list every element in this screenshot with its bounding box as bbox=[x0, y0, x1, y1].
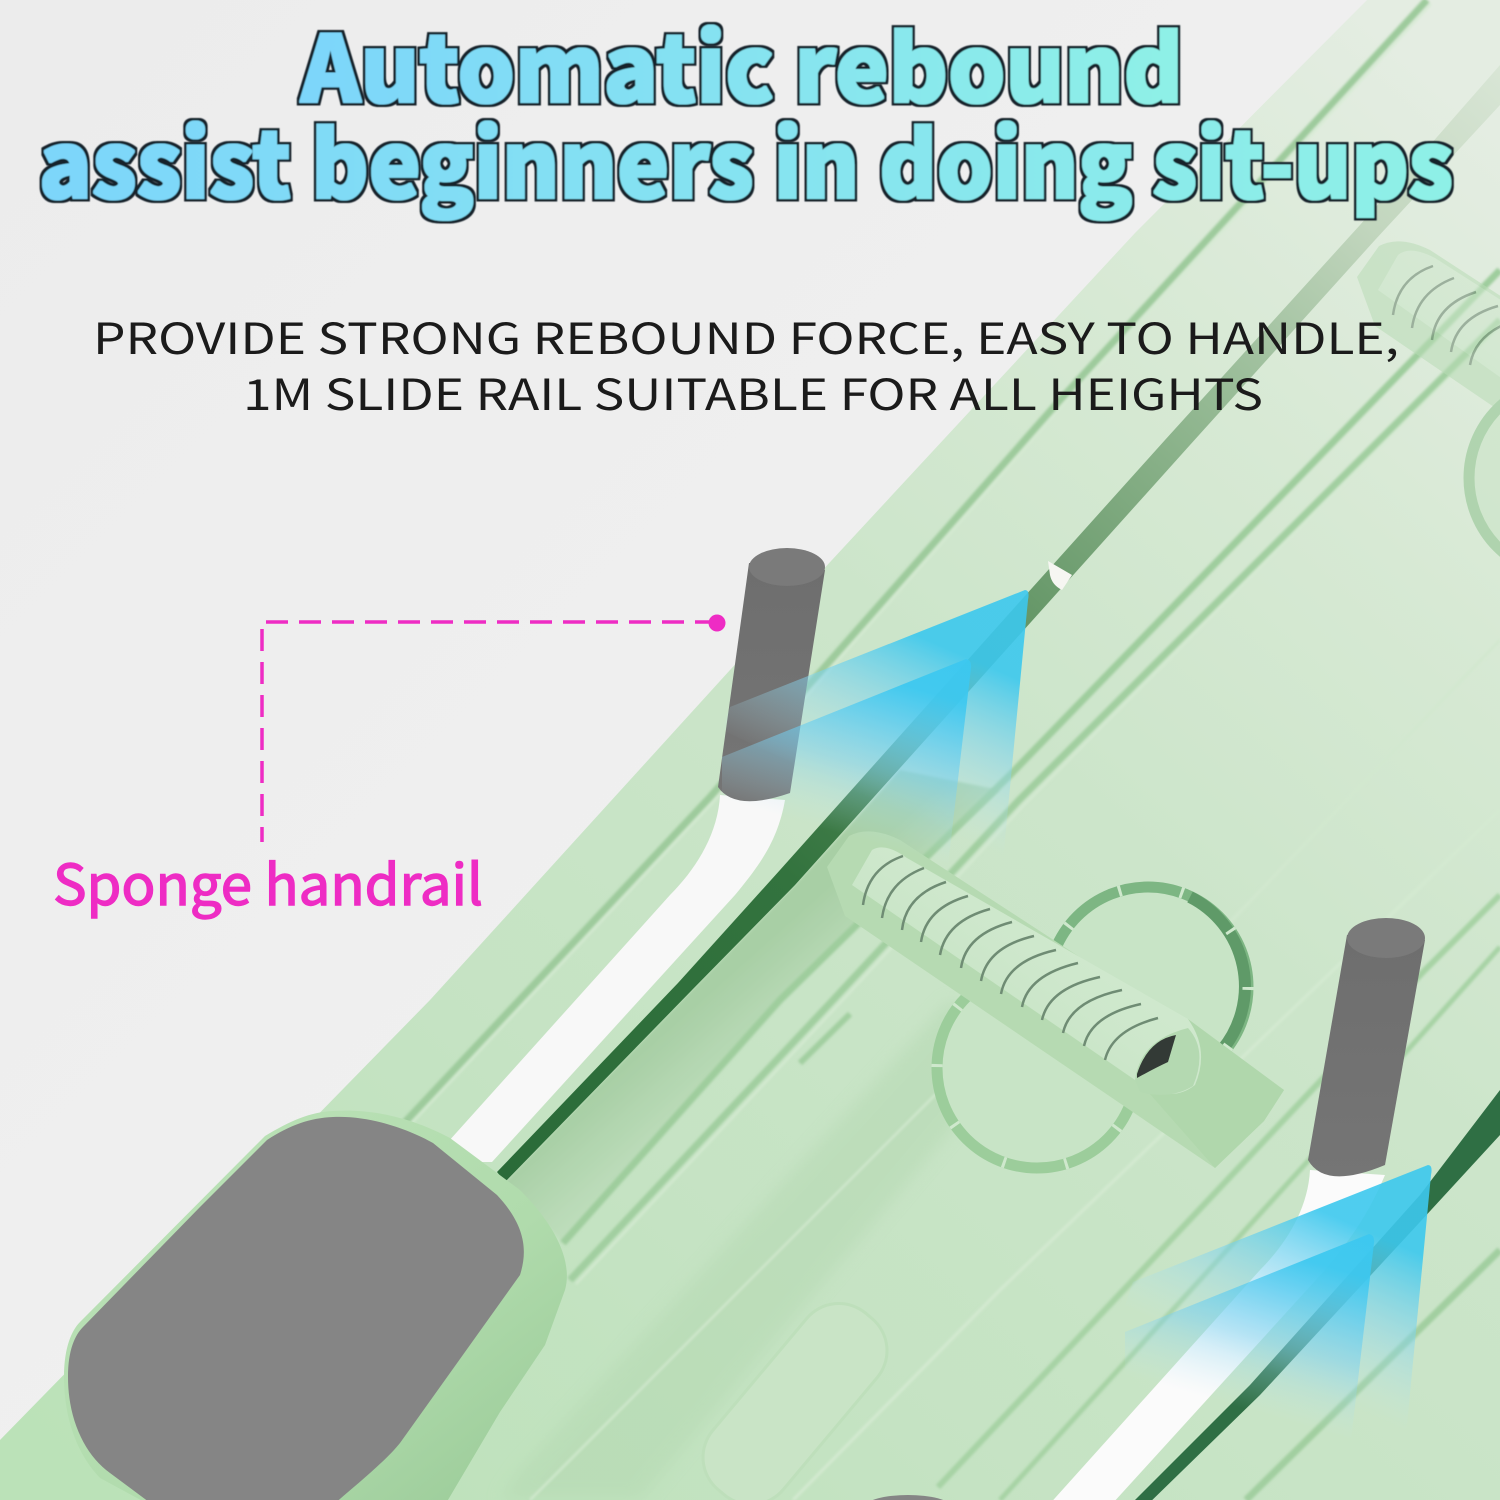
circular ring mounts bbox=[937, 887, 1248, 1168]
grey sponge handle bbox=[1308, 918, 1425, 1176]
motion shards one bbox=[722, 590, 1029, 865]
grip ridges bbox=[863, 856, 1158, 1060]
second pad edge bbox=[866, 1495, 950, 1500]
grey cushion bbox=[68, 1117, 524, 1500]
handrail two bbox=[1020, 918, 1425, 1500]
white bent rail bbox=[430, 795, 785, 1162]
slot notch bbox=[1048, 561, 1072, 590]
title bbox=[39, 0, 1453, 225]
ridged green grip bbox=[827, 831, 1284, 1168]
subtitle: PROVIDE STRONG REBOUND FORCE, EASY TO HANDLE, bbox=[93, 305, 1399, 367]
callout: sponge handrail bbox=[53, 614, 726, 922]
seat pad bbox=[64, 1111, 567, 1500]
subtitle bbox=[93, 305, 1399, 423]
central panel shading bbox=[500, 1000, 1010, 1500]
main slide slot bbox=[497, 65, 1500, 1182]
subtitle: 1M SLIDE RAIL SUITABLE FOR ALL HEIGHTS bbox=[243, 361, 1263, 423]
motion shards two bbox=[1125, 1165, 1432, 1440]
title: assist beginners in doing sit-ups bbox=[39, 92, 1453, 225]
rail stripes bbox=[405, 0, 1500, 1500]
grip end opening bbox=[1135, 1028, 1199, 1095]
callout: sponge handrail: Sponge handrail bbox=[53, 841, 483, 922]
handrail one bbox=[430, 548, 825, 1162]
upper right grip bbox=[1357, 241, 1500, 578]
recessed track shading bbox=[505, 770, 1000, 1243]
lower right slide slot bbox=[1130, 1090, 1500, 1500]
white bent rail bbox=[1020, 1170, 1385, 1500]
recessed pill bbox=[686, 1286, 904, 1500]
grey sponge handle bbox=[718, 548, 825, 801]
